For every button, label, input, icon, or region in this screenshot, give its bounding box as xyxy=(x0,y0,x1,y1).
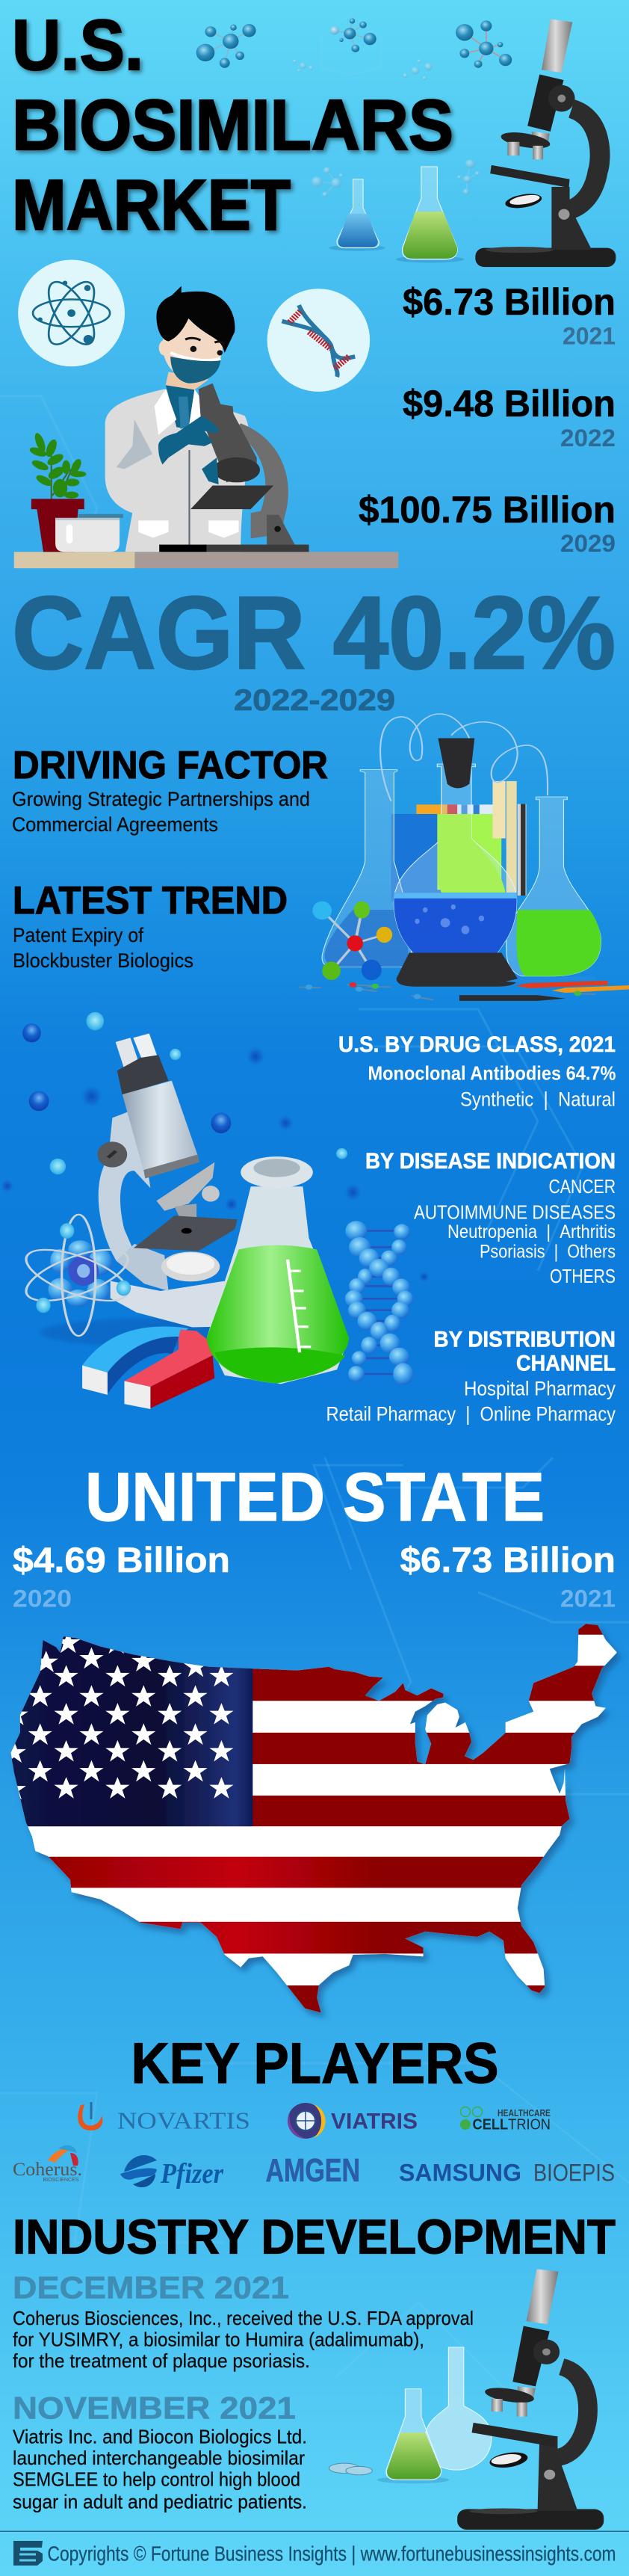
segmentation: drug class xyxy=(338,1032,616,1111)
molecule model xyxy=(312,902,392,980)
logo: Coherus: BIOSCIENCES xyxy=(43,2178,79,2183)
atom model xyxy=(15,1215,139,1336)
stat: 2020 US value xyxy=(13,1540,230,1612)
development: November 2021: sugar in adult and pediatric patients. xyxy=(13,2491,307,2513)
stat: 2021 US value: $6.73 Billion xyxy=(400,1540,616,1580)
stat: 2020 US value: $4.69 Billion xyxy=(13,1540,230,1580)
development: December 2021: for YUSIMRY, a biosimilar to Humira (adalimumab), xyxy=(13,2328,424,2350)
microscope xyxy=(457,2269,604,2530)
footer rule xyxy=(0,2531,629,2532)
stat: 2022 value: 2022 xyxy=(560,425,616,452)
icon: atom circle xyxy=(18,259,125,366)
illustration: white bowl xyxy=(55,514,123,552)
icon: molecule cluster 3 xyxy=(456,21,512,68)
segmentation: distribution channel: BY DISTRIBUTION xyxy=(433,1328,616,1352)
segmentation: disease indication: BY DISEASE INDICATION xyxy=(365,1149,616,1174)
segmentation: distribution channel: Hospital Pharmacy xyxy=(464,1377,616,1399)
market value figures xyxy=(359,281,616,557)
US flag map xyxy=(0,1618,629,2019)
illustration: glass flasks xyxy=(299,714,629,1001)
United State heading: UNITED STATE xyxy=(85,1459,545,1535)
development: November 2021 xyxy=(13,2391,307,2513)
latest trend: Blockbuster Biologics xyxy=(13,949,193,972)
segmentation: drug class: U.S. BY DRUG CLASS, 2021 xyxy=(338,1032,616,1057)
connecting tubes xyxy=(380,714,548,801)
icon: blue flask xyxy=(329,179,385,251)
books and ruler xyxy=(391,781,527,902)
title xyxy=(12,5,453,245)
logo: Celltrion Healthcare: HEALTHCARE xyxy=(498,2107,551,2119)
stat: 2020 US value: 2020 xyxy=(13,1585,72,1612)
floating bubbles xyxy=(1,1012,430,1282)
driving factor: Growing Strategic Partnerships and xyxy=(12,788,310,810)
icon: faint molecules xyxy=(293,59,480,197)
logo: Coherus: Coherus. xyxy=(13,2160,82,2180)
header illustrations xyxy=(14,18,616,568)
title: MARKET xyxy=(12,165,291,245)
centre flask xyxy=(394,739,518,987)
green flask xyxy=(207,1156,349,1384)
logo: Viatris xyxy=(288,2103,418,2139)
left flask xyxy=(322,770,412,967)
icon: molecule cluster 1 xyxy=(196,24,256,68)
logo: Celltrion Healthcare xyxy=(460,2107,551,2133)
segmentation: disease indication: CANCER xyxy=(548,1175,616,1198)
development: November 2021: NOVEMBER 2021 xyxy=(13,2391,296,2425)
right flask xyxy=(506,797,601,976)
development: November 2021: Viatris Inc. and Biocon Biologics Ltd. xyxy=(13,2425,307,2447)
driving factor xyxy=(12,744,328,836)
latest trend: Patent Expiry of xyxy=(13,924,143,946)
stat: 2021 value: 2021 xyxy=(563,323,616,350)
stat: 2021 value xyxy=(403,281,616,350)
icon: molecule cluster 2 xyxy=(330,18,377,52)
flag stars xyxy=(2,1631,234,1799)
logo: Samsung Bioepis: SAMSUNG xyxy=(399,2159,521,2186)
stat: 2029 value: 2029 xyxy=(560,530,616,557)
Industry development heading: INDUSTRY DEVELOPMENT xyxy=(13,2210,616,2264)
development: December 2021: DECEMBER 2021 xyxy=(13,2270,289,2305)
segmentation: distribution channel xyxy=(326,1328,616,1425)
logo: Fortune Business Insights xyxy=(13,2541,43,2566)
CAGR headline: CAGR 40.2% xyxy=(12,576,616,691)
conical flask xyxy=(377,2389,449,2483)
illustration: scientist xyxy=(105,286,309,552)
development: December 2021: Coherus Biosciences, Inc., received the U.S. FDA approval xyxy=(13,2307,474,2329)
illustration: potted plant xyxy=(28,432,86,552)
round flask xyxy=(425,2347,492,2470)
icon: microscope xyxy=(475,19,616,267)
logo: Novartis xyxy=(78,2102,250,2133)
microscope xyxy=(40,1034,281,1347)
segmentation: disease indication xyxy=(365,1149,616,1287)
logo: Samsung Bioepis: BIOEPIS xyxy=(533,2159,615,2186)
logo: Novartis: NOVARTIS xyxy=(117,2107,250,2133)
icon: lab microscope xyxy=(159,383,309,552)
logo: Pfizer: Pfizer xyxy=(160,2158,224,2190)
Key players heading: KEY PLAYERS xyxy=(131,2032,499,2096)
logo: Celltrion Healthcare: CELLTRION xyxy=(472,2117,551,2133)
development: November 2021: launched interchangeable biosimilar xyxy=(13,2447,305,2469)
logo: Samsung Bioepis xyxy=(399,2159,615,2186)
title: U.S. xyxy=(12,5,143,85)
DNA helix xyxy=(345,1221,413,1384)
latest trend: LATEST TREND xyxy=(13,879,288,922)
stat: 2022 value: $9.48 Billion xyxy=(403,383,616,425)
illustration: bottom lab glassware and microscope xyxy=(329,2269,604,2530)
stat: 2029 value xyxy=(359,489,616,557)
magnet xyxy=(82,1327,214,1409)
icon: DNA circle xyxy=(267,289,370,392)
icon: green flask xyxy=(396,167,464,263)
stat: 2022 value xyxy=(403,383,616,452)
petri dish xyxy=(329,2463,372,2475)
latest trend xyxy=(13,879,288,972)
logo: Amgen: AMGEN xyxy=(266,2152,360,2189)
stat: 2021 US value xyxy=(400,1540,616,1612)
stat: 2029 value: $100.75 Billion xyxy=(359,489,616,531)
segmentation: distribution channel: CHANNEL xyxy=(516,1352,616,1375)
stat: 2021 value: $6.73 Billion xyxy=(403,281,616,323)
pencils, pen and pins xyxy=(299,976,629,1001)
development: December 2021 xyxy=(13,2270,474,2372)
illustration: lab bench xyxy=(14,552,398,568)
driving factor: Commercial Agreements xyxy=(12,813,218,836)
CAGR headline: 2022-2029 xyxy=(234,684,395,717)
segmentation: disease indication: OTHERS xyxy=(550,1265,616,1287)
title: BIOSIMILARS xyxy=(12,85,453,165)
development: November 2021: SEMGLEE to help control high blood xyxy=(13,2468,300,2491)
illustration: microscope group with bubbles xyxy=(1,1012,430,1409)
development: December 2021: for the treatment of plaque psoriasis. xyxy=(13,2349,310,2372)
logo: Coherus xyxy=(13,2145,82,2183)
driving factor: DRIVING FACTOR xyxy=(13,744,328,787)
stat: 2021 US value: 2021 xyxy=(560,1585,616,1612)
logo: Viatris: VIATRIS xyxy=(331,2110,418,2133)
logo: Pfizer xyxy=(120,2155,224,2190)
